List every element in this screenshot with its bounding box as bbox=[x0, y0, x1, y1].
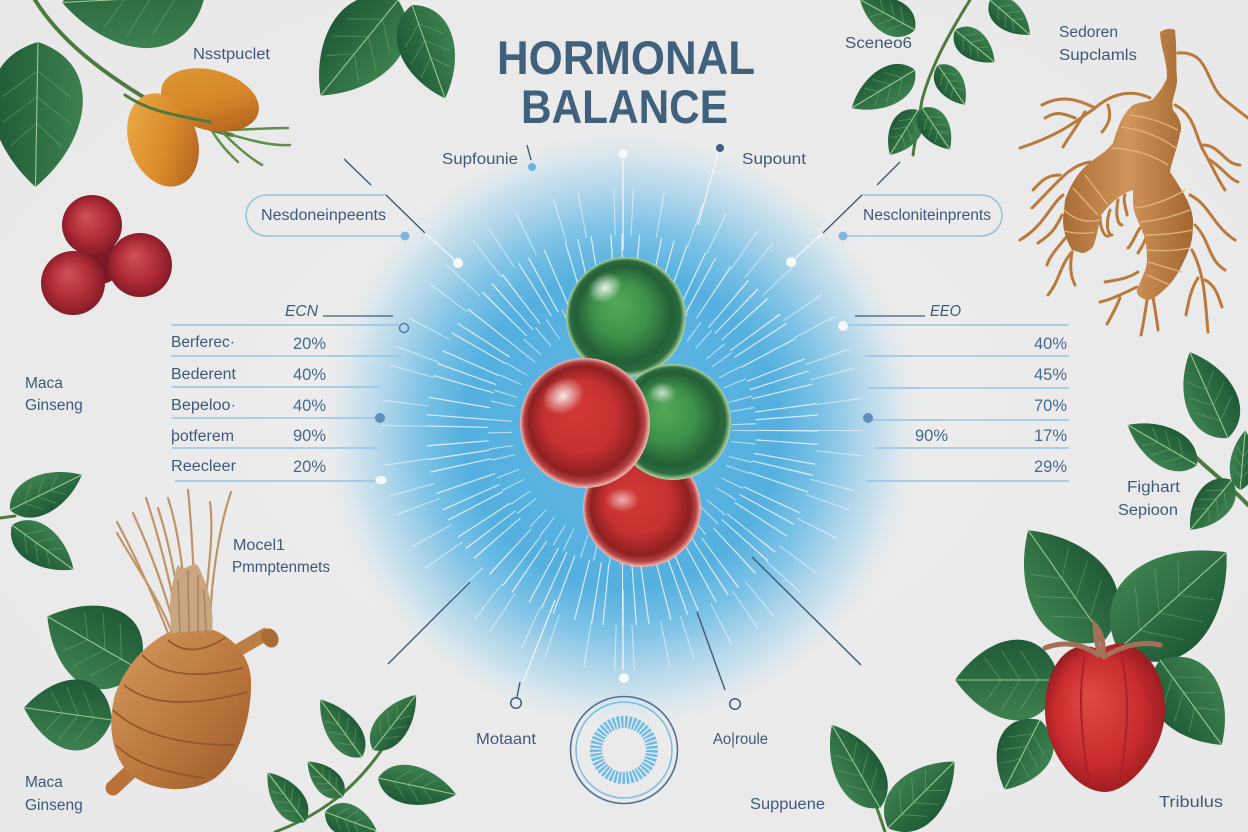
illustration: right-middle branch: Fighart bbox=[1127, 479, 1181, 496]
bottom pointers: Motaant bbox=[476, 731, 537, 748]
top right callout box: Nescloniteinprents bbox=[863, 207, 991, 224]
left data table: Bepeloo· bbox=[171, 397, 236, 414]
top pointers and labels: Supount bbox=[742, 151, 807, 168]
icon: bottom ring gauge bbox=[570, 696, 678, 804]
left data table: þotferem bbox=[171, 428, 234, 445]
left data table: 20% bbox=[293, 335, 326, 353]
illustration: maca root bbox=[19, 490, 330, 814]
left data table: 90% bbox=[293, 427, 326, 445]
illustration: right-middle branch: Sepioon bbox=[1118, 502, 1178, 519]
illustration: top-right branch bbox=[842, 0, 1040, 163]
label: maca ginseng left: Ginseng bbox=[25, 397, 83, 414]
right data table: EEO bbox=[930, 303, 961, 320]
right data table: 70% bbox=[1034, 397, 1067, 415]
illustration: bottom-centre branch: Suppuene bbox=[750, 796, 825, 813]
label: maca ginseng left: Maca bbox=[25, 375, 63, 392]
illustration: right-middle branch bbox=[1118, 342, 1248, 541]
left data table: ECN bbox=[285, 303, 318, 320]
illustration: top-left leaves and nuts bbox=[0, 0, 290, 197]
right data table: 90% bbox=[915, 427, 948, 445]
left data table: Bederent bbox=[171, 366, 237, 383]
title bbox=[497, 31, 755, 133]
bottom pointers bbox=[388, 557, 861, 748]
illustration: left-middle leaves bbox=[0, 458, 90, 585]
top pointers and labels bbox=[442, 144, 807, 250]
illustration: red berries bbox=[41, 195, 172, 315]
illustration: ginseng root: Supclamls bbox=[1059, 47, 1137, 64]
left data table: 40% bbox=[293, 366, 326, 384]
left data table: 20% bbox=[293, 458, 326, 476]
illustration: tribulus fruit: Tribulus bbox=[1159, 794, 1223, 811]
top left callout box bbox=[246, 159, 463, 268]
illustration: top-centre leaves bbox=[292, 0, 471, 119]
right data table: 45% bbox=[1034, 366, 1067, 384]
illustration: ginseng root: Sedoren bbox=[1059, 24, 1118, 41]
title: BALANCE bbox=[521, 80, 728, 133]
left data table: 40% bbox=[293, 397, 326, 415]
hormone spheres bbox=[520, 257, 731, 567]
blue radial glow with rays bbox=[317, 125, 927, 735]
illustration: maca root: Ginseng bbox=[25, 797, 83, 814]
left data table bbox=[171, 303, 408, 484]
left data table: Reecleer bbox=[171, 458, 236, 475]
title: HORMONAL bbox=[497, 31, 755, 84]
top pointers and labels: Supfounie bbox=[442, 151, 518, 168]
top right callout box bbox=[786, 162, 1002, 267]
label: maca ginseng left bbox=[25, 375, 83, 414]
illustration: top-right branch: Sceneo6 bbox=[845, 35, 912, 52]
right data table: 17% bbox=[1034, 427, 1067, 445]
illustration: ginseng root bbox=[1020, 24, 1248, 335]
right data table: 29% bbox=[1034, 458, 1067, 476]
bottom pointers: Ao|roule bbox=[713, 731, 768, 748]
illustration: top-left leaves and nuts: Nsstpuclet bbox=[193, 46, 271, 63]
illustration: maca root: Maca bbox=[25, 774, 63, 791]
illustration: bottom-centre branch bbox=[750, 713, 973, 832]
top left callout box: Nesdoneinpeents bbox=[261, 207, 386, 224]
illustration: tribulus fruit bbox=[955, 506, 1248, 811]
illustration: maca root: Pmmptenmets bbox=[232, 559, 330, 576]
left data table: Berferec· bbox=[171, 334, 235, 351]
right data table bbox=[838, 303, 1069, 481]
illustration: maca root: Mocel1 bbox=[233, 537, 285, 554]
right data table: 40% bbox=[1034, 335, 1067, 353]
illustration: bottom-left branch bbox=[256, 685, 460, 832]
